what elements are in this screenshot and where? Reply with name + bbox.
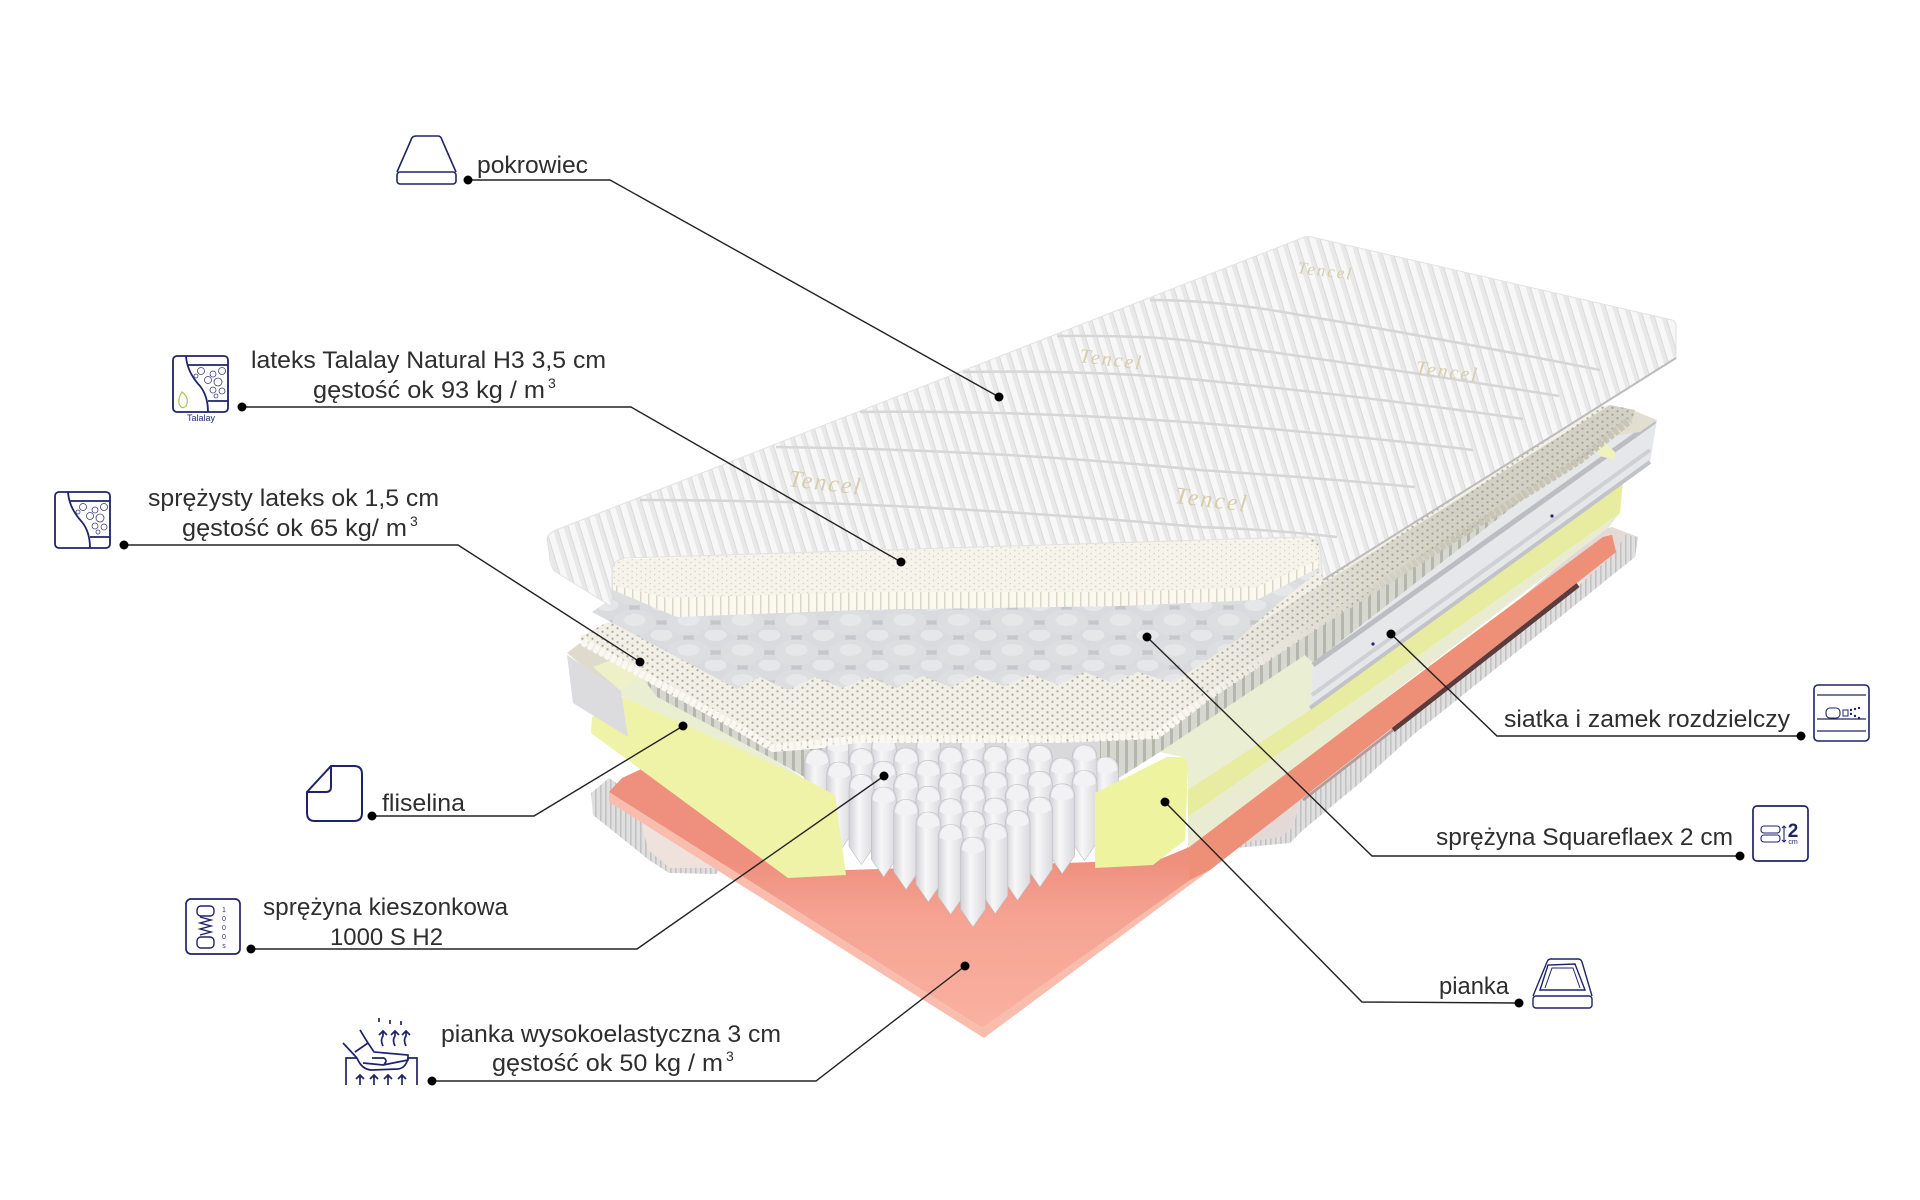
leader: pianka wysokoelastyczna bbox=[428, 962, 970, 1086]
pocket springs bbox=[804, 723, 1118, 927]
label: sprężysty lateks: gęstość ok 65 kg/ m bbox=[182, 515, 407, 542]
label: pokrowiec: pokrowiec bbox=[477, 152, 588, 179]
icon: fleece sheet bbox=[307, 766, 362, 821]
label: lateks Talalay bbox=[251, 347, 606, 404]
elastic latex layer bbox=[580, 405, 1635, 752]
leader: pianka bbox=[1160, 798, 1524, 1008]
mattress illustration bbox=[547, 236, 1676, 1038]
label: sprężyna kieszonkowa bbox=[263, 894, 509, 951]
Talalay latex layer bbox=[613, 530, 1318, 617]
Tencel logos: Tencel bbox=[787, 466, 864, 501]
label: sprężysty lateks bbox=[148, 485, 439, 542]
icon: Squareflex spring bbox=[1753, 806, 1808, 861]
label: pianka wysokoelastyczna: 3 bbox=[726, 1048, 734, 1064]
leader: sprężyna Squareflaex bbox=[1142, 632, 1744, 860]
label: sprężyna kieszonkowa: 1000 S H2 bbox=[330, 924, 443, 951]
Tencel logos: Tencel bbox=[1297, 258, 1354, 284]
label: lateks Talalay: 3 bbox=[548, 375, 556, 391]
fleece right side bbox=[1160, 655, 1313, 790]
leader: fliselina bbox=[368, 722, 688, 820]
icon: elastic latex bbox=[55, 492, 110, 548]
icon: pocket spring bbox=[186, 899, 240, 954]
pink high-resilience foam bbox=[609, 535, 1616, 1038]
icon: pocket spring: s bbox=[222, 943, 226, 950]
mesh with zipper bbox=[1310, 407, 1657, 710]
label: siatka i zamek: siatka i zamek rozdzielczy bbox=[1504, 706, 1790, 733]
icon: Squareflex spring: cm bbox=[1788, 839, 1798, 846]
bottom cover right side bbox=[1205, 527, 1638, 870]
icon: mesh and zipper bbox=[1814, 685, 1869, 741]
yellow foam right block bbox=[1095, 757, 1188, 868]
Tencel logos bbox=[787, 258, 1480, 518]
label: pianka: pianka bbox=[1439, 973, 1510, 1000]
yellow foam long side bbox=[1188, 482, 1623, 848]
Tencel logos: Tencel bbox=[1173, 483, 1250, 518]
Squareflex egg foam layer bbox=[592, 540, 1320, 690]
top cover bbox=[547, 236, 1676, 607]
label: lateks Talalay: gęstość ok 93 kg / m bbox=[313, 377, 545, 404]
icon: Talalay latex bbox=[173, 356, 228, 423]
label: pianka wysokoelastyczna bbox=[441, 1021, 781, 1077]
leader: pokrowiec bbox=[464, 176, 1004, 402]
label: lateks Talalay: lateks Talalay Natural H3 3,5 cm bbox=[251, 347, 606, 374]
corner mesh tag bbox=[567, 643, 640, 737]
icon: Squareflex spring: 2 bbox=[1788, 821, 1798, 842]
icon: cover bbox=[397, 136, 456, 184]
icon: pocket spring: 0 bbox=[222, 925, 226, 932]
Tencel logos: Tencel bbox=[1414, 357, 1480, 387]
icon: high-resilience foam with hand bbox=[343, 1018, 417, 1085]
leader: sprężysty lateks bbox=[120, 540, 644, 666]
label: sprężysty lateks: sprężysty lateks ok 1,5 cm bbox=[148, 485, 439, 512]
label: pianka wysokoelastyczna: pianka wysokoelastyczna 3 cm bbox=[441, 1021, 781, 1048]
icon: pocket spring: 0 bbox=[222, 934, 226, 941]
label: sprężyna kieszonkowa: sprężyna kieszonkowa bbox=[263, 894, 509, 921]
icon: foam frame bbox=[1533, 959, 1592, 1008]
yellow foam left block bbox=[591, 667, 846, 878]
icon: pocket spring: 0 bbox=[222, 916, 226, 923]
label: fliselina: fliselina bbox=[382, 790, 466, 817]
leader: siatka i zamek bbox=[1386, 630, 1806, 740]
leader: sprężyna kieszonkowa bbox=[246, 772, 888, 954]
icon: pocket spring: 1 bbox=[222, 907, 226, 914]
Tencel logos: Tencel bbox=[1078, 345, 1144, 375]
side springs bbox=[583, 412, 1635, 800]
label: sprężyna Squareflaex: sprężyna Squareflaex 2 cm bbox=[1436, 824, 1733, 851]
bottom cover left side bbox=[591, 778, 730, 874]
leader: lateks Talalay bbox=[238, 402, 906, 566]
icon: Talalay latex: Talalay bbox=[187, 413, 216, 423]
label: pianka wysokoelastyczna: gęstość ok 50 kg / m bbox=[492, 1050, 723, 1077]
label: sprężysty lateks: 3 bbox=[410, 513, 418, 529]
